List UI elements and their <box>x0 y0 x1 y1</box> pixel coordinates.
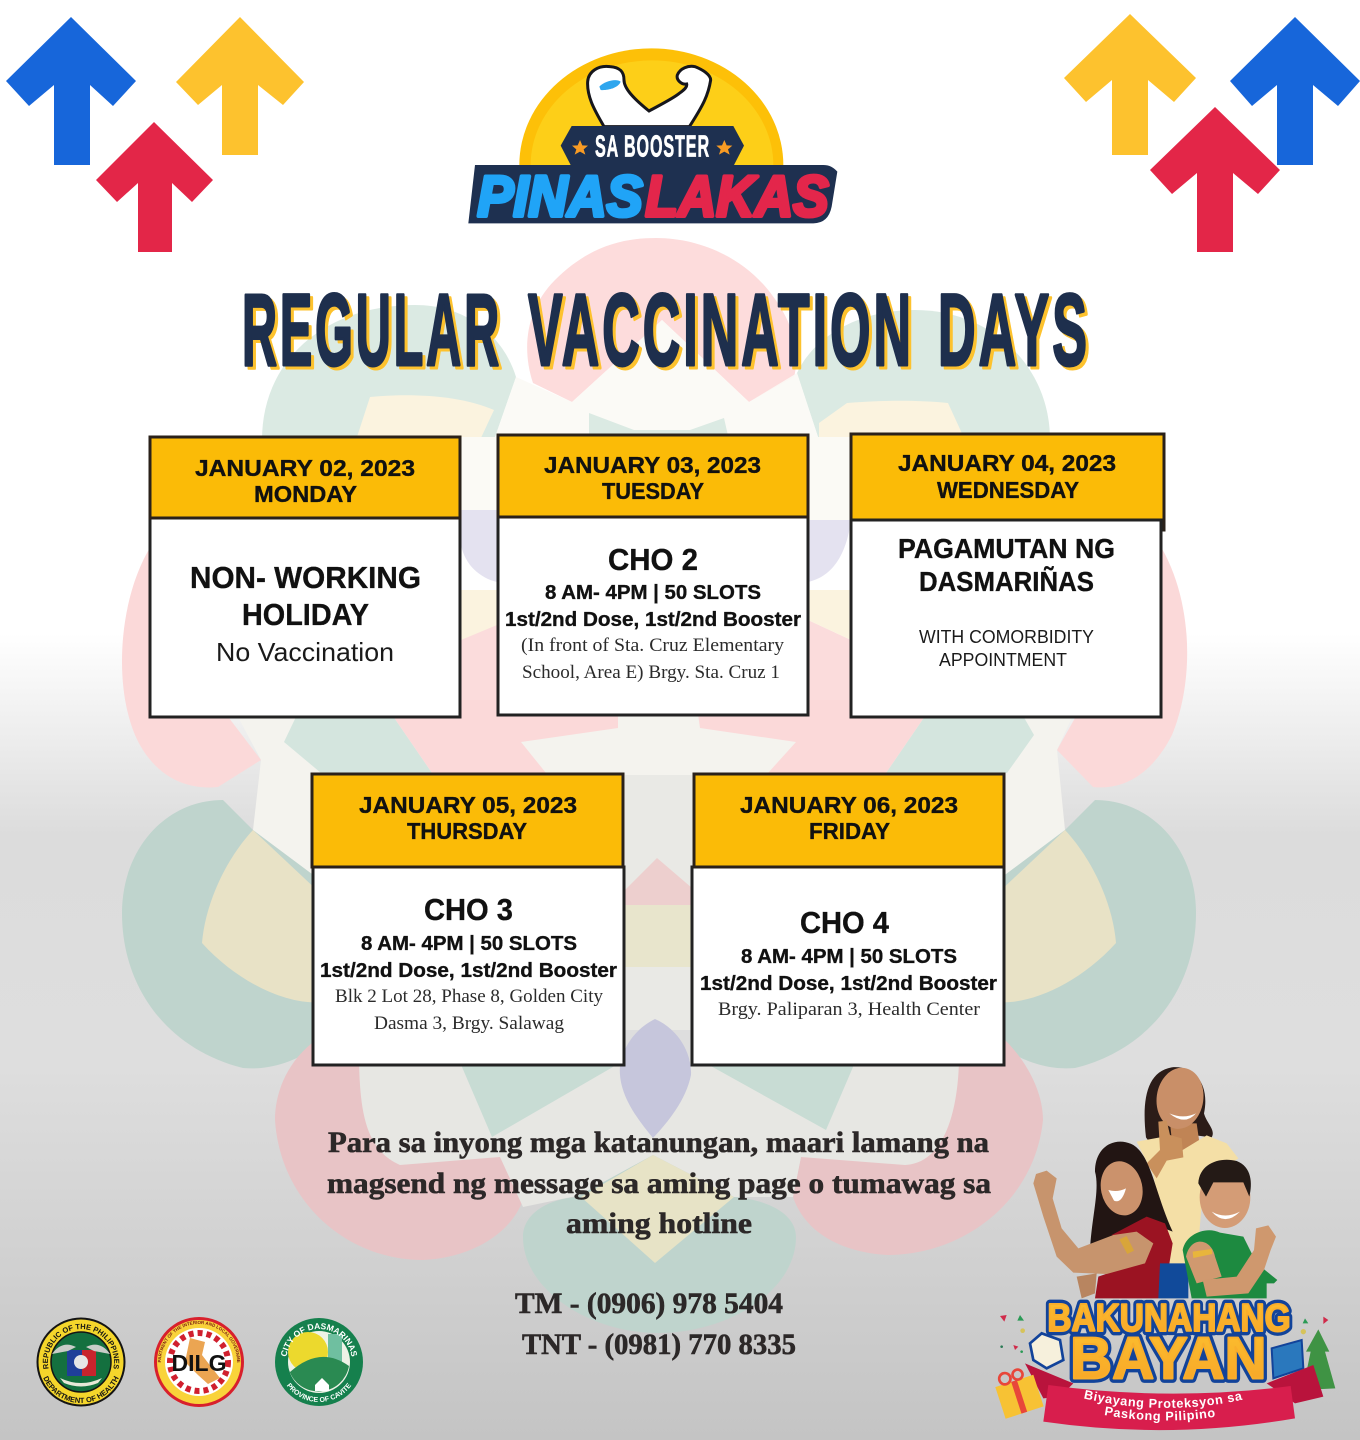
logo: Sa Booster Pinaslakas <box>468 48 837 229</box>
lower green petals <box>122 800 320 1068</box>
inner star <box>359 1060 959 1207</box>
seal: Department of Health: DEPARTMENT OF HEALTH <box>43 1376 119 1403</box>
card: January 04 Wednesday: JANUARY 04, 2023 <box>898 450 1116 476</box>
top pink petal <box>527 238 796 402</box>
arrows right group <box>1064 14 1360 252</box>
seal: DILG: DILG <box>172 1350 226 1376</box>
title: DAYS <box>938 273 1090 387</box>
card: January 02 Monday: NON- WORKING <box>190 560 421 595</box>
card: January 04 Wednesday: WEDNESDAY <box>937 477 1079 503</box>
title: VACCINATION <box>531 276 917 390</box>
card: January 06 Friday: JANUARY 06, 2023 <box>740 792 958 818</box>
contact message: magsend ng message sa aming page o tumawag sa <box>327 1167 991 1200</box>
card: January 05 Thursday: Dasma 3, Brgy. Salawag <box>374 1013 564 1034</box>
title: VACCINATION <box>528 273 914 387</box>
lower pink petals <box>275 1040 523 1260</box>
seal: City of Dasmarinas: CITY OF DASMARINAS <box>281 1323 357 1356</box>
contact message: Para sa inyong mga katanungan, maari lamang na <box>328 1126 989 1159</box>
seal: DILG <box>154 1317 244 1407</box>
flower watermark <box>122 238 1196 1333</box>
arrow: red right <box>1150 107 1280 252</box>
bakunahang text: BAKUNAHANG <box>1047 1297 1291 1340</box>
title: REGULAR <box>245 276 505 390</box>
ribbon <box>1025 1363 1324 1430</box>
card: January 05 Thursday: 1st/2nd Dose, 1st/2nd Booster <box>320 960 617 982</box>
centre pink <box>382 700 618 773</box>
side pink petals <box>122 540 261 787</box>
bakunahang text: BAKUNAHANG <box>1047 1297 1291 1340</box>
hotline numbers: TM - (0906) 978 5404 <box>515 1287 783 1320</box>
arrows left group <box>6 17 304 252</box>
card: January 06 Friday <box>692 774 1004 1065</box>
bottom green petal <box>523 1155 796 1333</box>
illustration: family flexing arms <box>1033 1065 1277 1298</box>
card: January 03 Tuesday <box>498 435 808 715</box>
arrow: blue left <box>6 17 136 165</box>
card: January 02 Monday: No Vaccination <box>216 637 394 667</box>
centre column <box>625 775 692 1030</box>
card: January 03 Tuesday: CHO 2 <box>608 542 698 577</box>
gaps between top cards <box>461 437 497 510</box>
bayan text: BAYAN <box>1070 1324 1267 1391</box>
icon: vaccine pack <box>1272 1340 1303 1378</box>
card: January 02 Monday: HOLIDAY <box>242 597 369 632</box>
ribbon: Biyayang Proteksyon sa <box>1084 1390 1243 1410</box>
arrow: yellow right <box>1064 14 1196 155</box>
card: January 06 Friday: CHO 4 <box>800 905 890 940</box>
card: January 06 Friday: 8 AM- 4PM | 50 SLOTS <box>741 946 957 968</box>
seal: DILG: DEPARTMENT OF THE INTERIOR AND LOCAL GOVERNMENT <box>158 1320 240 1363</box>
seal: City of Dasmarinas <box>275 1318 363 1406</box>
card: January 03 Tuesday: TUESDAY <box>602 478 704 504</box>
seal: City of Dasmarinas: PROVINCE OF CAVITE <box>286 1382 352 1402</box>
contact message: aming hotline <box>566 1207 752 1240</box>
card: January 03 Tuesday: 8 AM- 4PM | 50 SLOTS <box>545 582 761 604</box>
title: DAYS <box>941 276 1093 390</box>
icon: christmas tree <box>1303 1329 1335 1390</box>
card: January 06 Friday: Brgy. Paliparan 3, Health Center <box>718 999 981 1020</box>
card: January 03 Tuesday: JANUARY 03, 2023 <box>544 452 761 478</box>
card: January 05 Thursday: THURSDAY <box>407 818 527 844</box>
arrow: blue right <box>1230 17 1360 165</box>
card: January 04 Wednesday: APPOINTMENT <box>939 650 1067 670</box>
arrow: red left <box>96 122 213 252</box>
logo: Sa Booster Pinaslakas: PINAS <box>477 165 643 229</box>
card: January 04 Wednesday <box>851 434 1164 717</box>
upper green petals <box>262 305 516 440</box>
logo: Sa Booster Pinaslakas: SA BOOSTER <box>595 130 710 164</box>
title: REGULAR <box>242 273 502 387</box>
card: January 05 Thursday: Blk 2 Lot 28, Phase 8, Golden City <box>335 986 603 1007</box>
logo: Bakunahang Bayan <box>995 1297 1336 1430</box>
card: January 02 Monday: JANUARY 02, 2023 <box>195 455 415 481</box>
contact message <box>327 1126 991 1240</box>
card: January 03 Tuesday: 1st/2nd Dose, 1st/2nd Booster <box>505 609 801 631</box>
bayan text: BAYAN <box>1070 1324 1267 1391</box>
card: January 05 Thursday: JANUARY 05, 2023 <box>359 792 577 818</box>
card: January 03 Tuesday: (In front of Sta. Cruz Elementary <box>521 635 785 656</box>
icon: gift box <box>992 1365 1044 1419</box>
card: January 06 Friday: FRIDAY <box>809 818 890 844</box>
card: January 06 Friday: 1st/2nd Dose, 1st/2nd Booster <box>700 973 997 995</box>
teal blocks <box>284 700 432 773</box>
card: January 02 Monday: MONDAY <box>254 481 357 507</box>
confetti <box>1000 1315 1328 1353</box>
hotline numbers: TNT - (0981) 770 8335 <box>522 1328 796 1361</box>
icon: arm <box>1030 1333 1063 1368</box>
seal: Department of Health: REPUBLIC OF THE PHILIPPINES <box>42 1324 120 1369</box>
card: January 03 Tuesday: School, Area E) Brgy. Sta. Cruz 1 <box>522 662 780 683</box>
card: January 05 Thursday: CHO 3 <box>424 892 513 927</box>
ribbon: Paskong Pilipino <box>1104 1406 1215 1423</box>
card: January 05 Thursday: 8 AM- 4PM | 50 SLOTS <box>361 933 577 955</box>
card: January 02 Monday <box>150 437 460 717</box>
card: January 04 Wednesday: WITH COMORBIDITY <box>919 627 1094 647</box>
purple teardrop <box>620 1019 691 1138</box>
card: January 04 Wednesday: PAGAMUTAN NG <box>898 533 1115 564</box>
hotline numbers <box>515 1287 796 1361</box>
arrow: yellow left <box>176 17 304 155</box>
card: January 05 Thursday <box>312 774 624 1065</box>
title <box>242 273 1093 390</box>
seal: Department of Health <box>36 1318 126 1406</box>
card: January 04 Wednesday: DASMARIÑAS <box>919 566 1094 597</box>
logo: Sa Booster Pinaslakas: LAKAS <box>645 165 829 229</box>
star centre <box>229 700 1080 880</box>
